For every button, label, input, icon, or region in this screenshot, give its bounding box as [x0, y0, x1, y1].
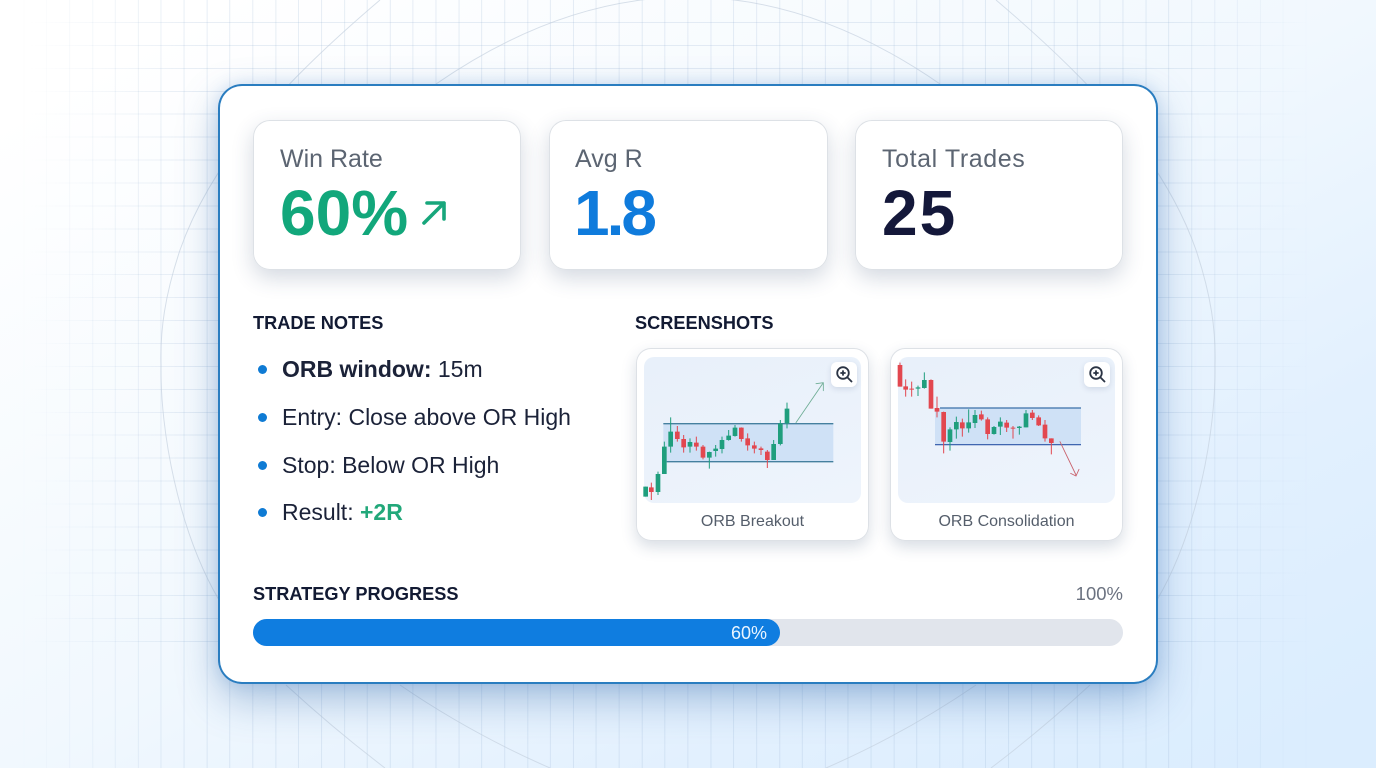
- candlestick chart: breakout: [643, 382, 834, 500]
- screenshot card: ORB consolidation: [890, 348, 1123, 541]
- bullet: result: [258, 508, 267, 516]
- note: stop: Stop: Below OR High: [282, 452, 499, 478]
- note: result: Result: +2R: [282, 499, 403, 525]
- caption: ORB consolidation: ORB Consolidation: [938, 512, 1075, 530]
- label: avg R: Avg R: [575, 145, 643, 173]
- value: 1.8: 1.8: [574, 177, 654, 249]
- chart image: ORB consolidation: [898, 357, 1115, 503]
- icon: zoom magnifier: [831, 362, 857, 387]
- stat card: average R: [549, 120, 828, 270]
- trade notes list: [258, 356, 571, 525]
- label: 100%: 100%: [1076, 583, 1123, 604]
- heading: screenshots: SCREENSHOTS: [635, 313, 773, 333]
- screenshot card: ORB breakout: [636, 348, 869, 541]
- heading: trade notes: TRADE NOTES: [253, 313, 383, 333]
- progress value: 60%: 60%: [731, 623, 767, 643]
- label: win rate: Win Rate: [280, 145, 383, 173]
- chart image: ORB breakout: [644, 357, 861, 503]
- progress bar track: [253, 619, 1123, 646]
- background grid: horizontal lines: [92, 22, 1254, 642]
- value: 60%: 60%: [280, 177, 408, 249]
- bullet: stop: [258, 460, 267, 470]
- caption: ORB breakout: ORB Breakout: [701, 512, 804, 530]
- bullet: entry: [258, 412, 267, 422]
- heading: strategy progress: STRATEGY PROGRESS: [253, 584, 458, 604]
- stat card: total trades: [855, 120, 1123, 270]
- icon: zoom magnifier: [1084, 362, 1110, 387]
- main dashboard card: [218, 84, 1158, 684]
- progress bar fill: 60%: [253, 619, 780, 646]
- stat card: win rate: [253, 120, 521, 270]
- note: entry: Entry: Close above OR High: [282, 404, 571, 430]
- icon: up-right arrow: [422, 201, 446, 225]
- value: 25: 25: [882, 177, 957, 249]
- note: ORB window: ORB window: 15m: [282, 356, 483, 382]
- label: total trades: Total Trades: [882, 145, 1025, 173]
- candlestick chart: consolidation: [898, 362, 1081, 476]
- bullet: ORB window: [258, 364, 267, 374]
